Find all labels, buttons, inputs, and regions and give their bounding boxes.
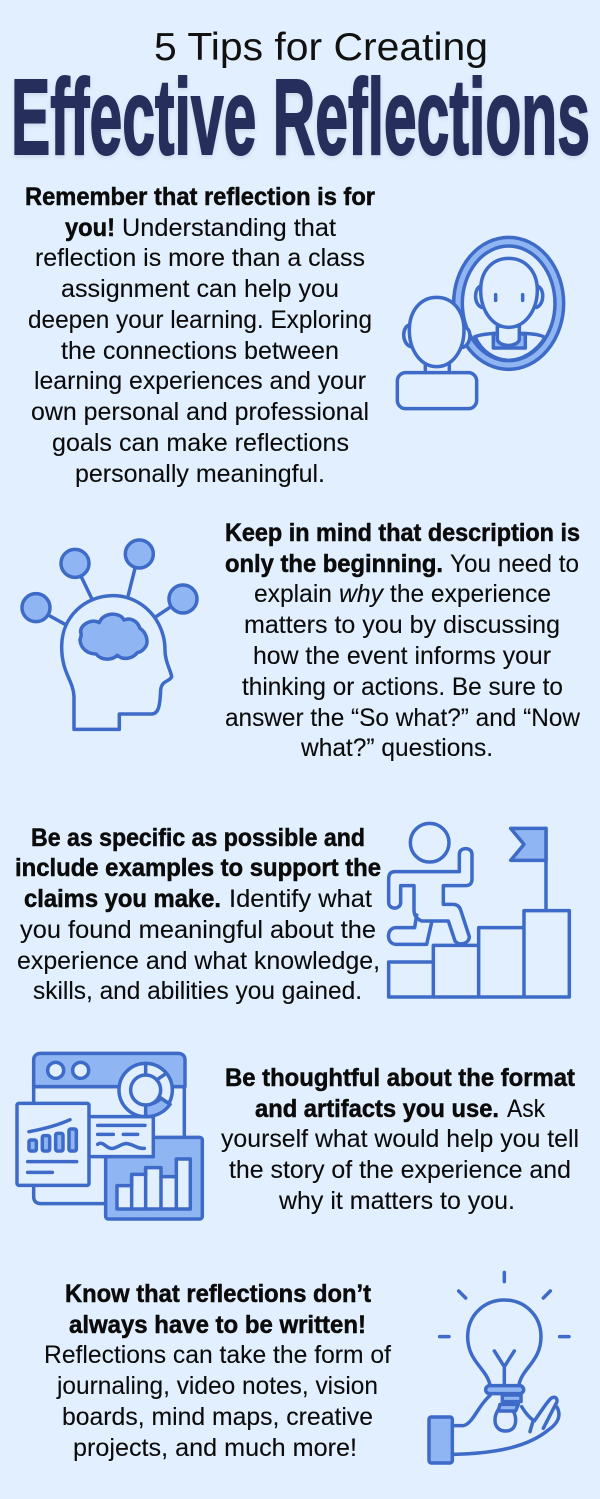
text block: tip 5: projects, and much more! bbox=[73, 1434, 357, 1462]
icon: hand holding a light bulb bbox=[429, 1272, 569, 1463]
text block: tip 3: you found meaningful about the bbox=[20, 916, 376, 944]
text block: tip 1: learning experiences and your bbox=[34, 367, 366, 395]
text block: tip 5: always have to be written! bbox=[69, 1311, 366, 1339]
text block: tip 2: thinking or actions. Be sure to bbox=[242, 673, 563, 701]
text block: tip 1: own personal and professional bbox=[31, 398, 369, 426]
icon: head with connected ideas bbox=[22, 540, 197, 729]
text block: tip 1: personally meaningful. bbox=[75, 460, 325, 488]
icon: person climbing steps to a flag bbox=[388, 823, 569, 997]
title line: 5 Tips for Creating: 5 Tips for Creating bbox=[154, 26, 488, 69]
text block: tip 1: reflection is more than a class bbox=[35, 244, 365, 272]
text block: tip 1 bbox=[25, 183, 375, 488]
text block: tip 5: boards, mind maps, creative bbox=[62, 1403, 373, 1431]
text block: tip 3: claims you make. bbox=[24, 885, 221, 913]
text block: tip 3: skills, and abilities you gained. bbox=[33, 977, 362, 1005]
text block: tip 4: yourself what would help you tell bbox=[221, 1125, 579, 1153]
text block: tip 2: why bbox=[339, 580, 384, 608]
icon: dashboard with charts bbox=[17, 1053, 202, 1219]
text block: tip 4: Ask bbox=[507, 1095, 545, 1123]
text block: tip 3: include examples to support the bbox=[15, 854, 381, 882]
text block: tip 4 bbox=[221, 1064, 579, 1215]
text block: tip 2: explain bbox=[254, 580, 332, 608]
text block: tip 3: Identify what bbox=[229, 885, 372, 913]
text block: tip 2 bbox=[225, 519, 581, 762]
text block: tip 3: experience and what knowledge, bbox=[17, 947, 380, 975]
text block: tip 2: Keep in mind that description is bbox=[225, 519, 580, 547]
text block: tip 2: answer the “So what?” and “Now bbox=[225, 704, 581, 732]
text block: tip 2: only the beginning. bbox=[225, 550, 443, 578]
text block: tip 1: the connections between bbox=[61, 337, 339, 365]
text block: tip 1: Remember that reflection is for bbox=[25, 183, 375, 211]
text block: tip 2: the experience bbox=[390, 580, 551, 608]
text block: tip 1: goals can make reflections bbox=[52, 429, 349, 457]
title bbox=[11, 26, 590, 177]
text block: tip 2: matters to you by discussing bbox=[244, 611, 560, 639]
text block: tip 1: Understanding that bbox=[122, 214, 336, 242]
text block: tip 4: and artifacts you use. bbox=[255, 1095, 499, 1123]
text block: tip 5: Know that reflections don’t bbox=[65, 1280, 372, 1308]
text block: tip 5: Reflections can take the form of bbox=[44, 1341, 391, 1369]
icon: person looking in mirror bbox=[397, 237, 564, 409]
text block: tip 2: how the event informs your bbox=[253, 642, 551, 670]
text block: tip 3 bbox=[15, 824, 381, 1005]
text block: tip 4: why it matters to you. bbox=[278, 1187, 515, 1215]
text block: tip 2: You need to bbox=[450, 550, 579, 578]
text block: tip 1: you! bbox=[65, 214, 115, 242]
text block: tip 5: journaling, video notes, vision bbox=[56, 1372, 378, 1400]
text block: tip 1: deepen your learning. Exploring bbox=[28, 306, 372, 334]
text block: tip 2: what?” questions. bbox=[300, 734, 493, 762]
text block: tip 3: Be as specific as possible and bbox=[31, 824, 365, 852]
text block: tip 4: the story of the experience and bbox=[229, 1156, 571, 1184]
text block: tip 4: Be thoughtful about the format bbox=[225, 1064, 576, 1092]
text block: tip 5 bbox=[44, 1280, 391, 1462]
text block: tip 1: assignment can help you bbox=[61, 275, 339, 303]
